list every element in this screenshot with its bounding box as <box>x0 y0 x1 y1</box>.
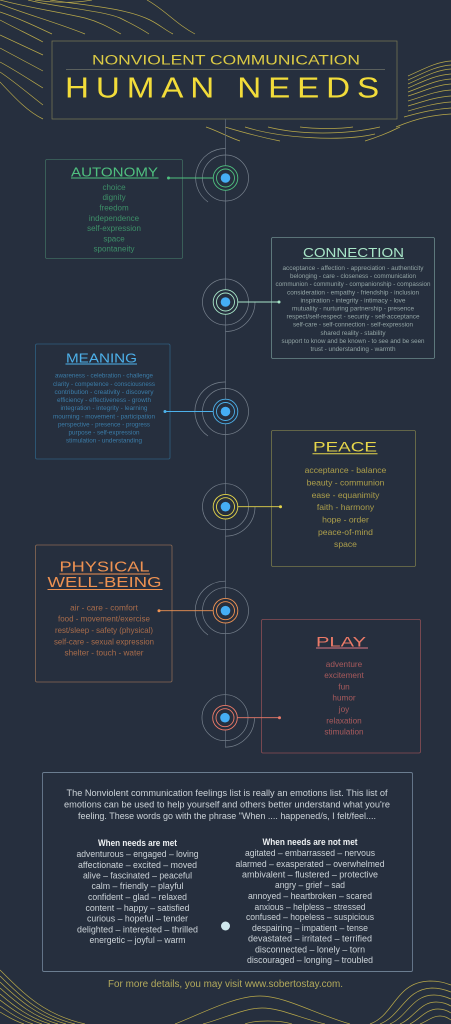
list: when needs are met: affectionate – excited – moved <box>78 860 197 870</box>
center dot <box>221 922 230 930</box>
node: peace <box>202 484 282 536</box>
heading: meaning: MEANING <box>66 350 137 366</box>
list: physical needs: shelter - touch - water <box>64 648 144 658</box>
list: meaning needs: contribution - creativity - discovery <box>54 389 154 396</box>
heading: connection: CONNECTION <box>303 245 404 260</box>
list: autonomy needs: freedom <box>99 204 129 212</box>
list: play needs: joy <box>338 705 350 714</box>
list: autonomy needs: dignity <box>102 193 126 202</box>
heading: play: PLAY <box>316 634 367 650</box>
heading: physical well-being <box>48 560 162 591</box>
intro text: feeling. These words go with the phrase "When .... happened/s, I felt/feel.... <box>78 811 376 821</box>
list: play needs: fun <box>338 682 350 692</box>
list: connection needs: respect/self-respect - security - self-acceptance <box>286 314 420 320</box>
list: meaning needs: awareness - celebration - challenge <box>55 372 153 380</box>
list: when needs are not met: alarmed – exasperated – overwhelmed <box>236 859 385 869</box>
list: play needs: humor <box>332 694 356 703</box>
list: physical needs: air - care - comfort <box>70 602 139 612</box>
list: connection needs: self-care - self-connection - self-expression <box>293 322 413 328</box>
heading: physical well-being: WELL-BEING <box>48 575 162 591</box>
list: play needs: excitement <box>324 671 365 680</box>
heading: peace: PEACE <box>313 438 377 454</box>
list: when needs are met: delighted – interested – thrilled <box>77 924 198 934</box>
list: connection needs <box>276 265 431 353</box>
list: when needs are met: energetic – joyful – warm <box>90 935 186 945</box>
panel: feelings list <box>42 772 412 972</box>
list: connection needs: trust - understanding - warmth <box>310 346 396 353</box>
list: when needs are not met: devastated – irritated – terrified <box>248 934 372 944</box>
list: physical needs: rest/sleep - safety (physical) <box>55 625 153 635</box>
list: connection needs: acceptance - affection - appreciation - authenticity <box>282 265 424 272</box>
list: meaning needs: mourning - movement - participation <box>53 414 155 420</box>
list: physical needs: self-care - sexual expression <box>54 636 154 646</box>
panel: meaning <box>36 344 170 459</box>
list: peace needs: hope - order <box>322 514 369 524</box>
list: play needs: relaxation <box>326 716 362 725</box>
list: connection needs: inspiration - integrity - intimacy - love <box>300 298 406 304</box>
list: when needs are not met: agitated – embarrassed – nervous <box>245 848 376 858</box>
list: connection needs: shared reality - stability <box>320 330 386 337</box>
panel: peace <box>272 430 416 566</box>
decorative waves: bottom left <box>0 970 85 1024</box>
list: connection needs: support to know and be known - to see and be seen <box>282 338 425 345</box>
list: when needs are met: curious – hopeful – tender <box>87 914 188 924</box>
node: physical well-being <box>158 581 248 635</box>
list: meaning needs: efficiency - effectiveness - growth <box>57 397 151 404</box>
intro text <box>64 788 390 821</box>
list: when needs are not met: ambivalent – flustered – protective <box>242 870 378 880</box>
list: when needs are met: confident – glad – relaxed <box>88 892 187 902</box>
list: peace needs: acceptance - balance <box>305 465 387 475</box>
list: when needs are met: When needs are met <box>98 838 177 848</box>
list: autonomy needs: choice <box>102 183 126 192</box>
title panel <box>52 41 397 119</box>
subtitle: NONVIOLENT COMMUNICATION <box>92 52 360 68</box>
list: autonomy needs: independence <box>89 214 140 223</box>
list: meaning needs: purpose - self-expression <box>68 430 140 436</box>
list: play needs: adventure <box>326 660 363 669</box>
list: play needs: stimulation <box>324 728 364 736</box>
list: connection needs: belonging - care - closeness - communication <box>290 273 416 280</box>
decorative waves: bottom center <box>175 996 350 1024</box>
panel: autonomy <box>46 160 182 258</box>
list: play needs <box>324 660 365 736</box>
list: autonomy needs: spontaneity <box>94 244 134 254</box>
list: meaning needs: integration - integrity - learning <box>60 405 148 412</box>
list: when needs are met: adventurous – engaged – loving <box>76 849 199 859</box>
list: when needs are not met: When needs are not met <box>262 837 358 847</box>
decorative waves: bottom right <box>370 981 451 1024</box>
list: when needs are not met <box>236 837 385 965</box>
list: meaning needs: clarity - competence - consciousness <box>53 381 155 388</box>
list: autonomy needs: self-expression <box>87 224 141 233</box>
node: meaning <box>164 382 248 436</box>
list: autonomy needs: space <box>103 234 125 243</box>
footer text: For more details, you may visit www.sobertostay.com. <box>108 979 343 990</box>
node: play <box>202 695 281 747</box>
list: meaning needs: perspective - presence - progress <box>58 422 150 428</box>
list: when needs are not met: despairing – impatient – tense <box>252 923 368 933</box>
list: when needs are not met: confused – hopeless – suspicious <box>246 912 375 922</box>
list: peace needs: peace-of-mind <box>318 527 373 537</box>
list: physical needs <box>54 602 154 658</box>
panel: play <box>262 620 420 753</box>
list: when needs are not met: annoyed – heartbroken – scared <box>248 891 372 901</box>
node: connection <box>202 279 280 332</box>
list: connection needs: communion - community - companionship - compassion <box>276 281 431 288</box>
intro text: emotions can be used to help yourself and others better understand what you're <box>64 800 390 810</box>
list: when needs are met: content – happy – satisfied <box>86 903 190 913</box>
list: peace needs: faith - harmony <box>317 502 375 512</box>
list: when needs are not met: angry – grief – sad <box>275 880 345 890</box>
panel: physical well-being <box>36 545 172 682</box>
main heading: HUMAN NEEDS <box>65 72 386 104</box>
list: connection needs: consideration - empathy - friendship - inclusion <box>287 290 419 296</box>
list: peace needs: ease - equanimity <box>312 490 380 500</box>
list: meaning needs <box>53 372 155 444</box>
list: peace needs: space <box>334 539 357 549</box>
heading: physical well-being: PHYSICAL <box>60 560 150 576</box>
list: when needs are not met: disconnected – lonely – torn <box>255 944 365 954</box>
list: when needs are met <box>76 838 199 945</box>
panel: connection <box>272 238 434 358</box>
list: when needs are met: calm – friendly – playful <box>92 881 184 891</box>
list: peace needs <box>305 465 387 549</box>
node: autonomy <box>167 148 248 202</box>
decorative waves: under title <box>206 127 400 141</box>
list: meaning needs: stimulation - understanding <box>66 438 142 444</box>
list: when needs are met: alive – fascinated – peaceful <box>83 870 192 880</box>
list: physical needs: food - movement/exercise <box>58 614 150 624</box>
intro text: The Nonviolent communication feelings list is really an emotions list. This list of <box>66 788 388 798</box>
list: peace needs: beauty - communion <box>307 478 385 488</box>
list: when needs are not met: discouraged – longing – troubled <box>247 955 373 965</box>
heading: autonomy: AUTONOMY <box>71 164 158 180</box>
timeline vertical line <box>224 119 226 747</box>
list: autonomy needs <box>87 183 141 254</box>
decorative waves: top left <box>0 0 195 119</box>
decorative waves: right of title <box>396 61 451 127</box>
list: when needs are not met: anxious – helpless – stressed <box>254 902 366 912</box>
list: connection needs: mutuality - nurturing partnership - presence <box>292 306 414 312</box>
